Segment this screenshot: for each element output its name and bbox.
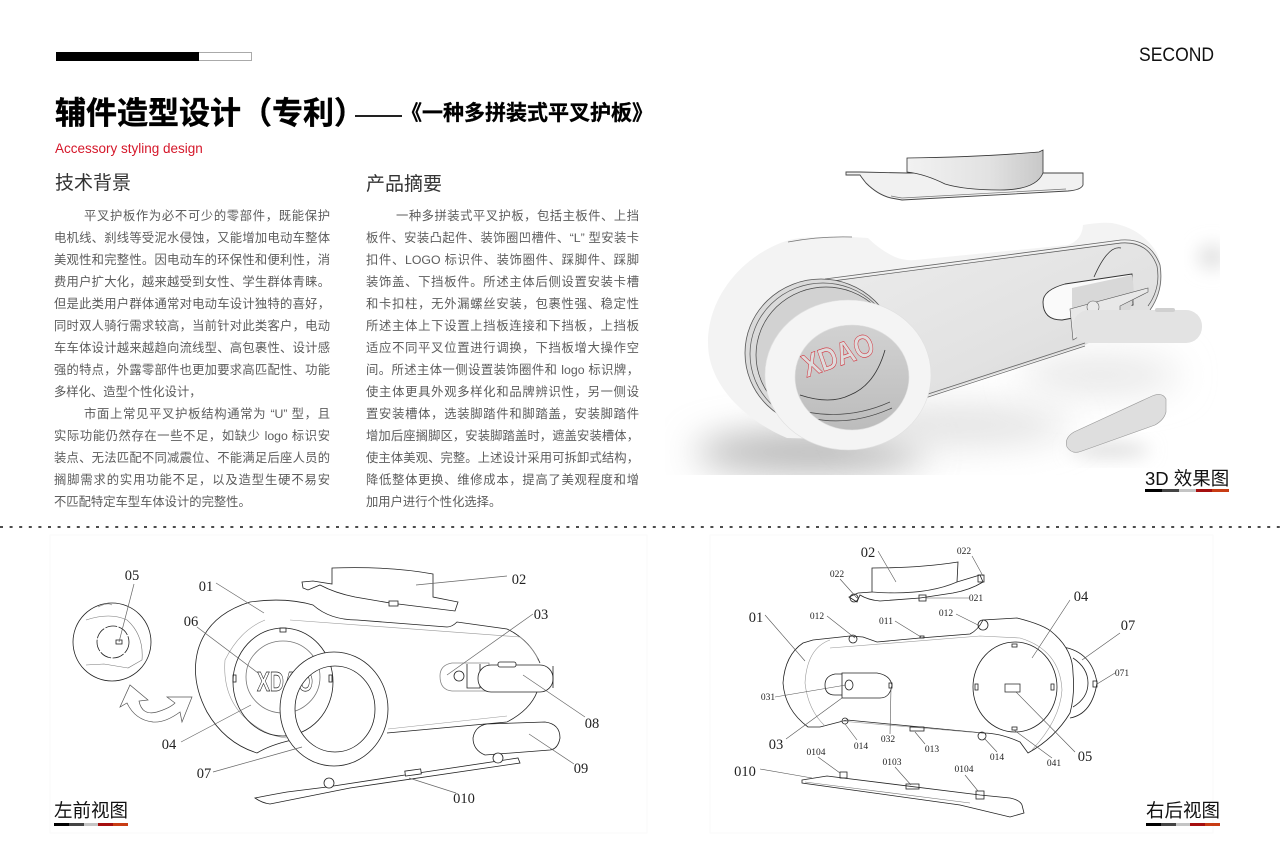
part numbers: 04 [162, 737, 177, 753]
text block: abstract: 使主体美观、完整。上述设计采用可拆卸式结构， [366, 451, 639, 465]
part numbers: 02 [861, 545, 875, 561]
part numbers: 010 [453, 791, 475, 807]
text block: abstract: 降低整体更换、维修成本，提高了美观程度和增 [366, 473, 639, 487]
text block: background: 电机线、刹线等受泥水侵蚀，又能增加电动车整体 [54, 231, 330, 245]
part numbers: 03 [769, 737, 783, 753]
part numbers: 05 [1078, 749, 1092, 765]
logo disc [795, 324, 909, 430]
text block: background: 同时双人骑行需求较高，当前针对此类客户，电动 [54, 319, 330, 333]
part numbers: 031 [761, 693, 775, 703]
text block: abstract: 间。所述主体一侧设置装饰圈件和 logo 标识牌， [366, 363, 639, 377]
part numbers: 022 [830, 570, 844, 580]
part numbers: 013 [925, 745, 939, 755]
slot opening [1043, 248, 1134, 320]
text block: background: 强的特点，外露零部件也更加要求高匹配性、功能 [54, 363, 330, 377]
title: 辅件造型设计（专利） [55, 96, 365, 131]
part numbers: 032 [881, 735, 895, 745]
part numbers: 0104 [954, 765, 974, 775]
small rear circle [73, 603, 151, 681]
logo disc: XDAO [797, 326, 879, 384]
title [55, 96, 653, 131]
part numbers: 071 [1115, 669, 1129, 679]
caption: right-rear view: 右后视图 [1146, 800, 1220, 821]
part numbers: 07 [197, 766, 211, 782]
caption: left-front view: 左前视图 [54, 800, 128, 821]
recess around logo [745, 279, 897, 427]
loose cover pad [1066, 394, 1166, 452]
subtitle: Accessory styling design [55, 141, 203, 156]
part numbers: 022 [957, 547, 971, 557]
part numbers: 01 [199, 579, 213, 595]
text block: background: 费用户扩大化，越来越受到女性、学生群体青睐。 [54, 275, 330, 289]
text block: background: 装点、无法匹配不同减震位、不能满足后座人员的 [54, 451, 330, 465]
part numbers: 08 [585, 716, 599, 732]
part numbers: 06 [184, 614, 198, 630]
part numbers [125, 568, 599, 807]
text block: abstract [366, 209, 639, 509]
part numbers [734, 545, 1135, 780]
panel: left-front view [50, 535, 647, 833]
upper guard plate [846, 150, 1083, 200]
slot and footrest [440, 662, 553, 692]
XDAO logo: XDAO [257, 666, 313, 697]
part numbers: 04 [1074, 589, 1089, 605]
lower guard [802, 772, 1024, 817]
text block: abstract: 一种多拼装式平叉护板，包括主板件、上挡 [396, 209, 639, 223]
part numbers: 07 [1121, 618, 1135, 634]
part numbers: 012 [810, 612, 824, 622]
text block: background: 市面上常见平叉护板结构通常为 “U” 型，且 [84, 407, 330, 421]
footrest [825, 673, 892, 698]
text block: abstract: 使主体更具外观多样化和品牌辨识性，另一侧设 [366, 385, 639, 399]
part numbers: 010 [734, 764, 756, 780]
switch arrow [120, 685, 192, 722]
part numbers: 011 [879, 617, 893, 627]
upper guard [302, 568, 458, 611]
part numbers: 0103 [882, 758, 902, 768]
heading: abstract: 产品摘要 [366, 174, 442, 195]
heading: background: 技术背景 [55, 173, 131, 194]
title: 《一种多拼装式平叉护板》 [401, 102, 653, 125]
part numbers: 05 [125, 568, 139, 584]
progress bar [56, 52, 252, 61]
text block: abstract: 增加后座搁脚区，安装脚踏盖时，遮盖安装槽体， [366, 429, 639, 443]
half ring 07 [1063, 647, 1097, 718]
text block: background: 平叉护板作为必不可少的零部件，既能保护 [84, 209, 330, 223]
part numbers: 01 [749, 610, 763, 626]
part numbers: 02 [512, 572, 526, 588]
text block: background: 多样化、造型个性化设计， [54, 385, 202, 399]
main plate outline [195, 600, 540, 753]
leader lines [760, 551, 1120, 791]
part numbers: 0104 [806, 748, 826, 758]
text block: abstract: 所述主体上下设置上挡板连接和下挡板，上挡板 [366, 319, 639, 333]
text block: background [54, 209, 330, 509]
text block: abstract: 加用户进行个性化选择。 [366, 495, 501, 509]
text block: abstract: 板件、安装凸起件、装饰圈凹槽件、“L” 型安装卡 [366, 231, 639, 245]
main plate body [708, 223, 1162, 440]
text block: abstract: 装饰盖、下挡板件。所述主体后侧设置安装卡槽 [366, 275, 639, 289]
part numbers: 014 [854, 742, 868, 752]
text block: abstract: 适应不同平叉位置进行调换，下挡板增大操作空 [366, 341, 639, 355]
part numbers: 041 [1047, 759, 1061, 769]
text block: background: 实际功能仍然存在一些不足，如缺少 logo 标识安 [54, 429, 330, 443]
lower guard [255, 753, 520, 804]
part numbers: 09 [574, 761, 588, 777]
leader lines [119, 576, 585, 793]
text block: background: 但是此类用户群体通常对电动车设计独特的喜好， [54, 297, 330, 311]
upper guard [849, 562, 984, 602]
part numbers: 03 [534, 607, 548, 623]
ground shadow [695, 245, 1226, 472]
panel: right-rear view [710, 535, 1213, 833]
text block: background: 美观性和完整性。因电动车的环保性和便利性，消 [54, 253, 330, 267]
foot cover [473, 722, 560, 755]
panel: 3D render [695, 150, 1226, 472]
text block: abstract: 扣件、LOGO 标识件、装饰圈件、踩脚件、踩脚 [366, 253, 639, 267]
section label SECOND: SECOND [1139, 44, 1214, 66]
part numbers: 014 [990, 753, 1004, 763]
caption: 3D render: 3D 效果图 [1145, 468, 1229, 489]
text block: background: 不匹配特定车型车体设计的完整性。 [54, 495, 251, 509]
decorative ring [765, 300, 931, 450]
part numbers: 021 [969, 594, 983, 604]
dashed divider [0, 526, 1280, 528]
main plate outline [783, 618, 1074, 753]
ring [280, 652, 388, 766]
footrest bracket and pad [1070, 288, 1202, 343]
part numbers: 012 [939, 609, 953, 619]
text block: background: 车车体设计越来越趋向流线型、高包裹性、设计感 [54, 341, 330, 355]
